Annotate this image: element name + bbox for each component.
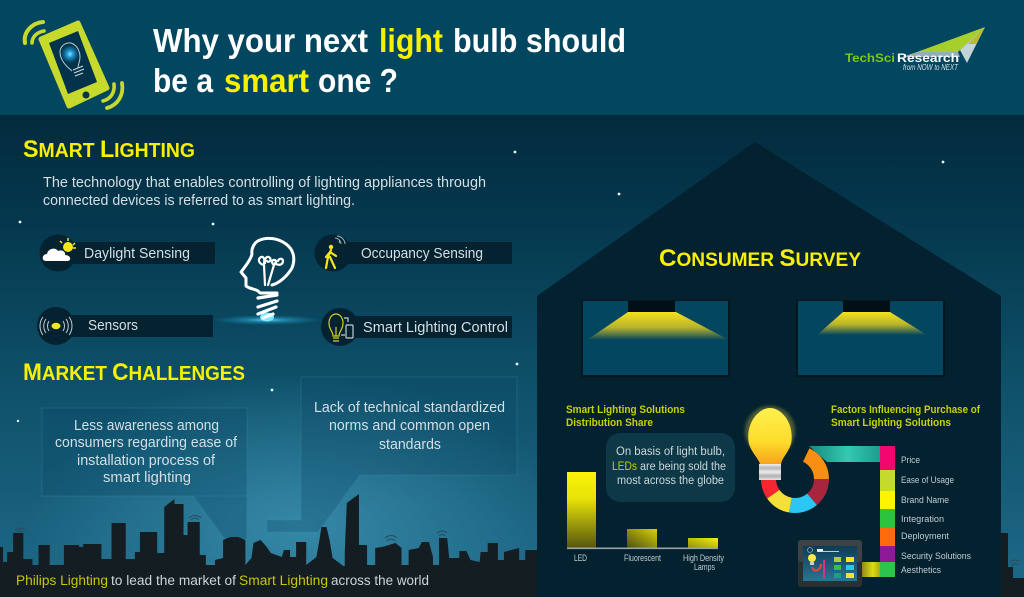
feature: Daylight Sensing	[40, 234, 215, 272]
icon: sensor waves	[40, 317, 72, 335]
callout: lack of standards: norms and common open	[329, 418, 490, 434]
factor colour bar	[880, 446, 895, 577]
icon: smartphone with light bulb	[25, 22, 122, 108]
bar labels	[574, 553, 724, 572]
heading: Smart Lighting: SMART LIGHTING	[23, 136, 195, 163]
feature: Smart Lighting Control: Smart Lighting Control	[363, 320, 508, 336]
donut chart	[761, 448, 829, 513]
stars	[17, 151, 944, 422]
feature: Daylight Sensing: Daylight Sensing	[84, 246, 190, 262]
bar: Fluorescent	[627, 529, 657, 548]
callout: less awareness	[42, 408, 247, 539]
footer statement: Philips Lighting	[16, 573, 108, 588]
window: left with lamp	[581, 300, 730, 377]
heading: distribution share: Distribution Share	[566, 417, 653, 429]
feature: Sensors: Sensors	[88, 318, 138, 334]
feature: Occupancy Sensing: Occupancy Sensing	[361, 246, 483, 262]
factor labels: Ease of Usage	[901, 475, 954, 485]
logo: TechSci Research: from NOW to NEXT	[903, 63, 959, 72]
title: Why your next	[153, 22, 368, 59]
factor labels: Aesthetics	[901, 565, 941, 575]
bar: LED	[567, 472, 596, 548]
title: one ?	[318, 62, 398, 99]
icon: glowing head light bulb	[212, 238, 322, 325]
callout: less awareness: smart lighting	[103, 470, 191, 486]
footer statement: Smart Lighting	[239, 573, 328, 588]
panel: purchase factors	[745, 404, 980, 587]
icon: walking person	[326, 236, 345, 268]
panel: distribution share bar chart	[566, 404, 735, 572]
header band	[0, 0, 1024, 115]
footer statement: to lead the market of	[111, 573, 236, 588]
feature: Sensors	[37, 307, 213, 345]
connector: teal band	[809, 446, 880, 462]
bar labels: Fluorescent	[624, 553, 661, 563]
factor labels	[901, 455, 971, 575]
feature: Smart Lighting Control	[321, 308, 512, 346]
callout: less awareness: consumers regarding ease of	[55, 435, 238, 451]
factor labels: Integration	[901, 514, 944, 524]
feature: Occupancy Sensing	[314, 234, 512, 272]
icon: bulb and phone	[329, 314, 353, 341]
footer statement	[16, 573, 429, 588]
bar labels: Lamps	[694, 562, 715, 572]
factor labels: Price	[901, 455, 920, 465]
factor labels: Deployment	[901, 531, 949, 541]
logo: TechSci Research: TechSci	[845, 51, 895, 65]
title: be a	[153, 62, 214, 99]
footer statement: across the world	[331, 573, 429, 588]
title	[153, 22, 626, 99]
icons: wifi signals on buildings	[15, 516, 1020, 565]
callout: LEDs sold the most: are being sold the	[640, 461, 726, 473]
callout: lack of standards	[267, 377, 517, 532]
text block: smart lighting definition: connected devices is referred to as smart lighting.	[43, 193, 355, 209]
heading: distribution share: Smart Lighting Solutions	[566, 404, 685, 416]
title: bulb should	[453, 22, 626, 59]
callout: LEDs sold the most: most across the globe	[617, 475, 724, 487]
heading: purchase factors: Smart Lighting Solutions	[831, 417, 951, 429]
heading: distribution share	[566, 404, 685, 429]
bar labels: High Density	[683, 553, 724, 563]
city skyline	[0, 494, 1024, 597]
connector: yellow band to tablet	[862, 562, 880, 577]
callout: less awareness: installation process of	[77, 453, 216, 469]
heading: purchase factors	[831, 404, 980, 429]
callout: lack of standards: standards	[379, 437, 441, 453]
callout: lack of standards: Lack of technical standardized	[314, 400, 505, 416]
icon: sun and cloud	[43, 238, 76, 261]
factor labels: Brand Name	[901, 495, 949, 505]
callout: LEDs sold the most	[606, 433, 735, 502]
icon: glowing yellow bulb	[745, 406, 795, 480]
factor labels: Security Solutions	[901, 551, 971, 561]
bar labels: LED	[574, 553, 587, 563]
heading: Market Challenges: MARKET CHALLENGES	[23, 359, 245, 386]
heading: purchase factors: Factors Influencing Purchase of	[831, 404, 980, 416]
house silhouette	[537, 142, 1001, 597]
heading: Consumer Survey: CONSUMER SURVEY	[659, 245, 861, 272]
callout: less awareness: Less awareness among	[74, 418, 219, 434]
logo: TechSci Research	[845, 27, 985, 72]
title: light	[379, 22, 443, 59]
icon: tablet	[798, 540, 862, 587]
text block: smart lighting definition	[43, 175, 486, 209]
window: right with lamp	[796, 300, 945, 377]
logo: TechSci Research: Research	[897, 51, 959, 65]
callout: LEDs sold the most: On basis of light bulb,	[616, 446, 725, 458]
title: smart	[224, 62, 309, 99]
bar: High Density Lamps	[688, 538, 718, 548]
callout: LEDs sold the most: LEDs	[612, 461, 637, 473]
text block: smart lighting definition: The technology that enables controlling of lighting appliances through	[43, 175, 486, 191]
